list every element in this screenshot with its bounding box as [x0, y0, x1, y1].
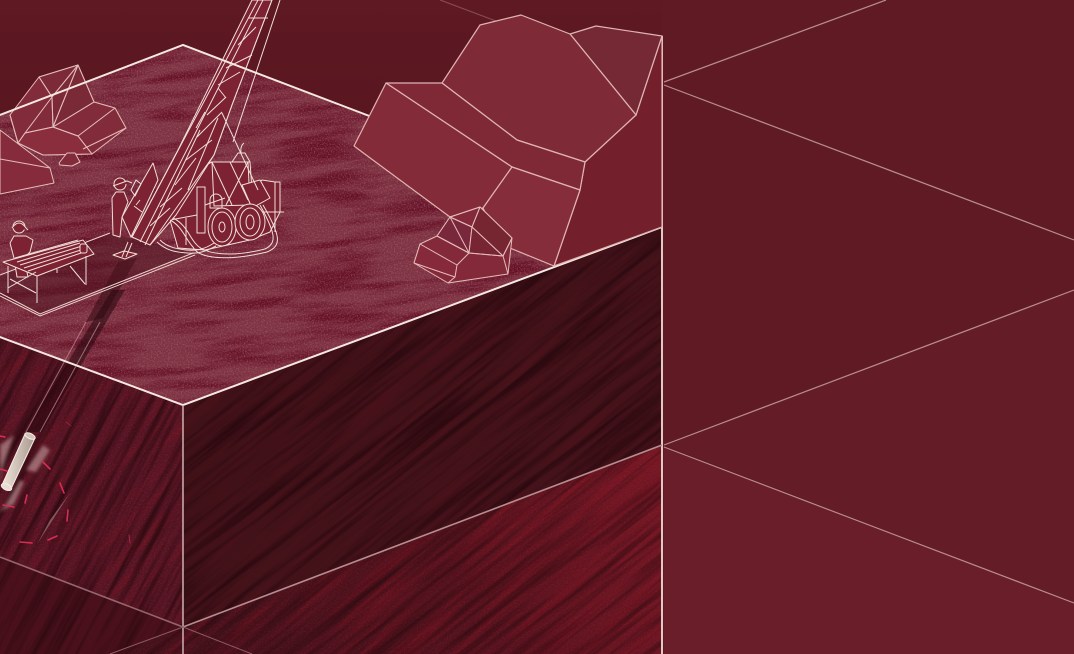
- lower right rock layer: [110, 445, 662, 654]
- back facet: [570, 26, 662, 115]
- work platform: [0, 233, 195, 316]
- drill hole shaft: [25, 258, 137, 432]
- rock pile, back left: [10, 65, 126, 166]
- right underground face: [183, 227, 662, 627]
- left facet: [354, 83, 512, 217]
- rig body: [170, 143, 284, 250]
- wheels: [208, 204, 265, 246]
- right panel plane lines: [440, 0, 1074, 603]
- control panel: [122, 163, 158, 237]
- red fracture marks: [0, 422, 130, 543]
- lower left rock layer: [0, 557, 183, 654]
- small stone: [59, 153, 80, 166]
- worker: [10, 221, 33, 277]
- drill rig: [112, 0, 284, 259]
- top surface edges: [0, 45, 662, 405]
- small boulder: [414, 207, 512, 283]
- rock, far left: [0, 130, 54, 194]
- jack foot: [113, 242, 137, 259]
- large rock outcrop: [354, 15, 662, 266]
- core cylinder: [0, 431, 36, 492]
- left underground face: [0, 337, 183, 627]
- hoses: [157, 205, 277, 258]
- lower facet: [483, 167, 580, 266]
- drill core and fractures: [0, 422, 130, 550]
- drill operator: [112, 178, 132, 237]
- pipes: [15, 240, 84, 271]
- top ground surface: [0, 45, 662, 405]
- block vertical and layer edges: [0, 36, 662, 654]
- middle band: [386, 83, 585, 190]
- top facet: [442, 15, 636, 162]
- table: [3, 240, 94, 276]
- mast: [132, 0, 280, 245]
- side face: [554, 36, 662, 266]
- pipe table and worker: [3, 221, 94, 303]
